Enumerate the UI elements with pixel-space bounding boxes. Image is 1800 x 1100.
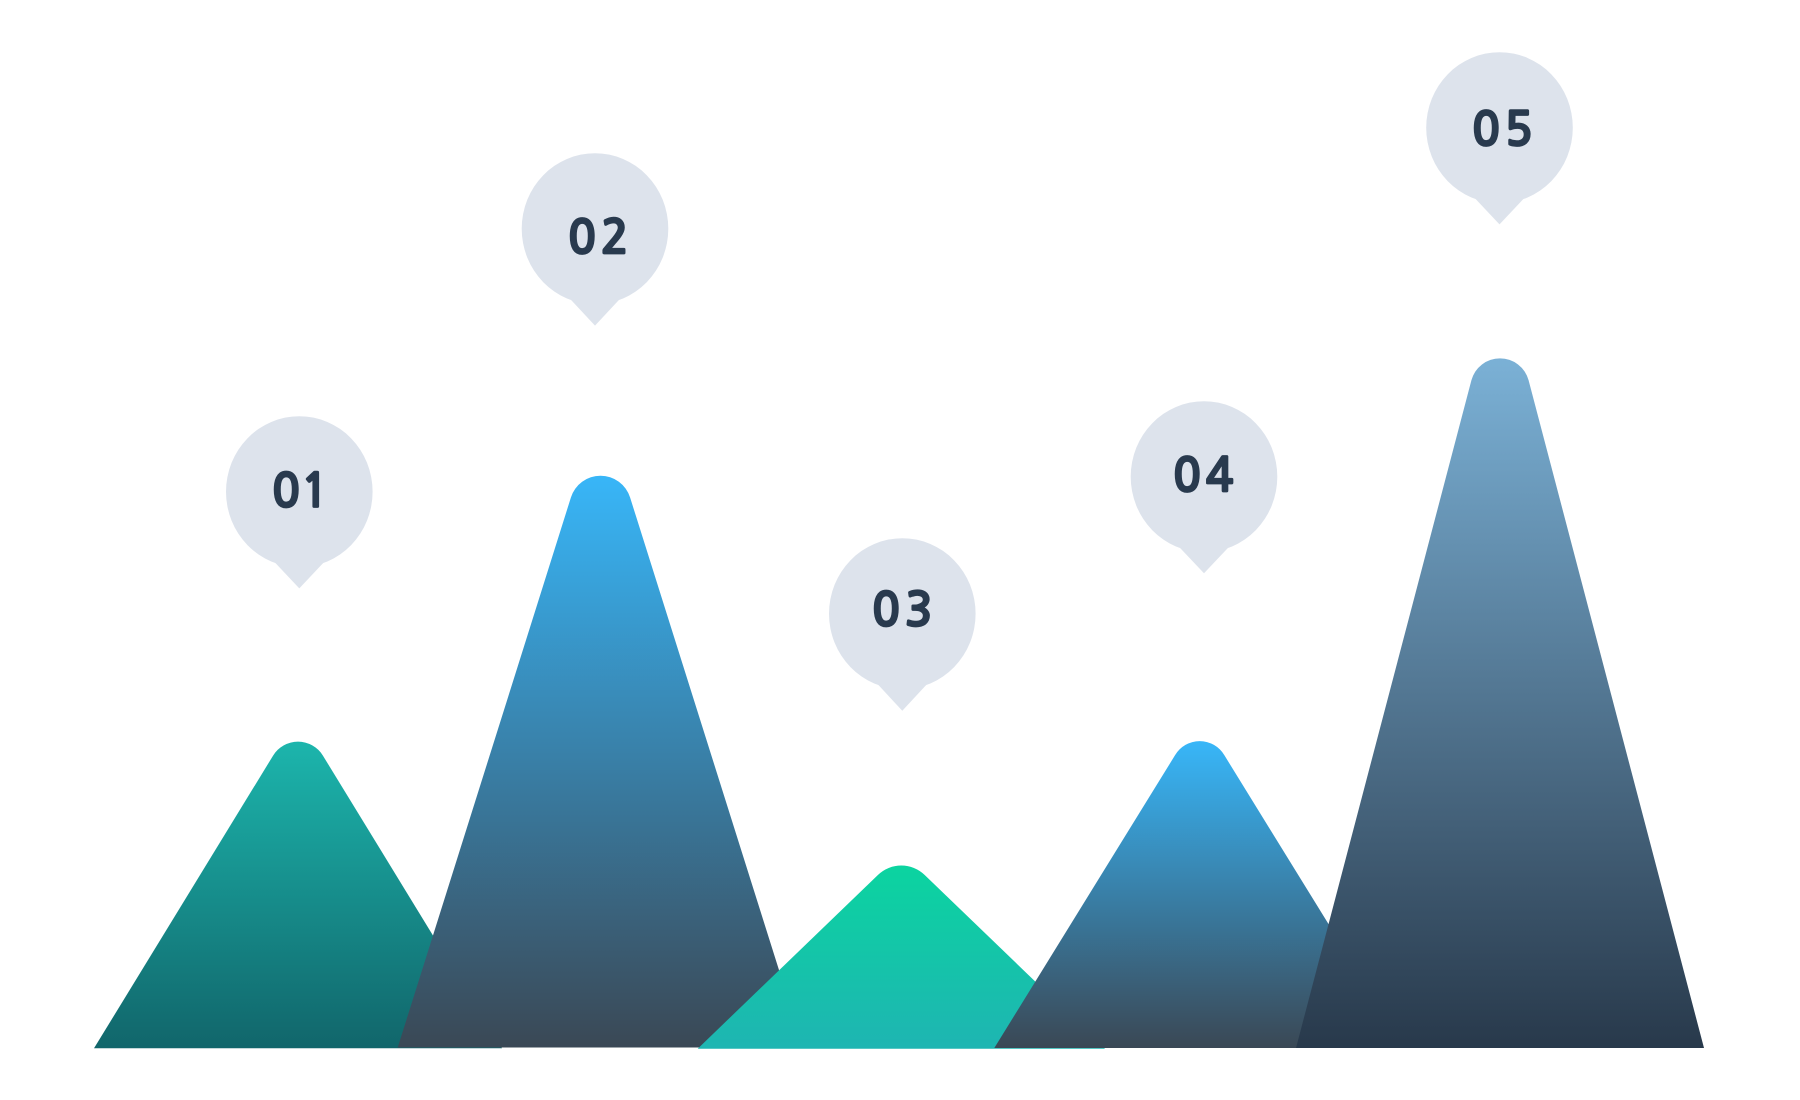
peak 02 [398,476,803,1048]
label 03: 03 [872,587,937,633]
peak 01 [94,742,502,1048]
marker 02 [522,153,668,326]
label 02: 02 [568,215,633,261]
label 05: 05 [1472,106,1537,152]
marker 01 [226,416,373,588]
marker 04 [1131,401,1277,573]
peak 05 [1296,358,1704,1048]
marker 05 [1426,52,1573,224]
peak 03 [698,866,1105,1049]
label 04: 04 [1173,453,1238,499]
peak 04 [994,741,1405,1048]
label 01: 01 [272,468,329,514]
marker 03 [829,538,976,711]
